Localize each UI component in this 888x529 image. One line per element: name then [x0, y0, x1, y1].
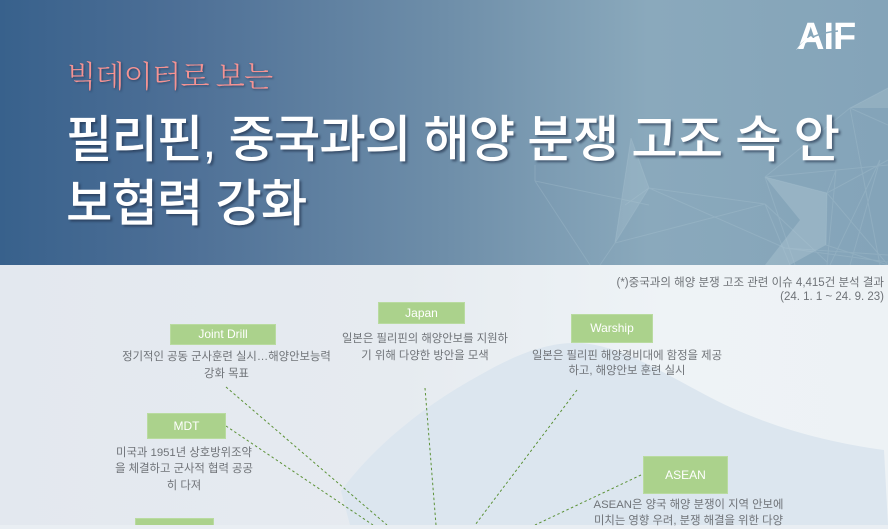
tag: Joint Drill — [170, 324, 276, 345]
text: Japan — [342, 332, 508, 362]
text: ASEAN: 미치는 영향 우려, 분쟁 해결을 위한 다양 — [594, 514, 783, 526]
text: Joint Drill — [122, 350, 331, 380]
text: Joint Drill: 정기적인 공동 군사훈련 실시…해양안보능력 — [122, 351, 331, 363]
tag: bottom clipped — [134, 518, 214, 525]
text: MDT: 히 다져 — [167, 480, 201, 492]
source note — [616, 276, 884, 303]
tag: Warship — [571, 314, 653, 343]
tag: Japan: Japan — [405, 306, 438, 320]
text: Japan: 기 위해 다양한 방안을 모색 — [361, 350, 489, 362]
text: Warship — [532, 349, 722, 377]
source note: (*)중국과의 해양 분쟁 고조 관련 이슈 4,415건 분석 결과 — [616, 277, 884, 289]
text: Joint Drill: 강화 목표 — [204, 368, 249, 380]
tag: Warship: Warship — [590, 321, 634, 335]
lower panel — [0, 265, 888, 525]
text: MDT: 미국과 1951년 상호방위조약 — [116, 446, 252, 458]
tag: MDT — [147, 413, 226, 439]
text: Japan: 일본은 필리핀의 해양안보를 지원하 — [342, 333, 508, 345]
header banner — [0, 0, 888, 265]
title — [66, 111, 842, 232]
tag: MDT: MDT — [174, 419, 200, 433]
source note: (24. 1. 1 ~ 24. 9. 23) — [780, 291, 884, 303]
text: MDT — [115, 446, 253, 492]
text: ASEAN: ASEAN은 양국 해양 분쟁이 지역 안보에 — [594, 499, 783, 511]
tag: Joint Drill: Joint Drill — [198, 327, 248, 341]
tag: Japan — [378, 302, 465, 324]
subtitle: 빅데이터로 보는 — [67, 61, 273, 94]
title: 보협력 강화 — [66, 174, 306, 232]
title: 필리핀, 중국과의 해양 분쟁 고조 속 안 — [66, 111, 839, 168]
text: Warship: 하고, 해양안보 훈련 실시 — [568, 365, 685, 377]
text: ASEAN — [594, 498, 783, 526]
network decoration — [534, 88, 888, 265]
text: MDT: 을 체결하고 군사적 협력 공공 — [115, 463, 253, 475]
tag: ASEAN: ASEAN — [665, 468, 706, 482]
wave background — [342, 343, 888, 525]
tag: ASEAN — [643, 456, 728, 494]
text: Warship: 일본은 필리핀 해양경비대에 함정을 제공 — [532, 350, 722, 362]
